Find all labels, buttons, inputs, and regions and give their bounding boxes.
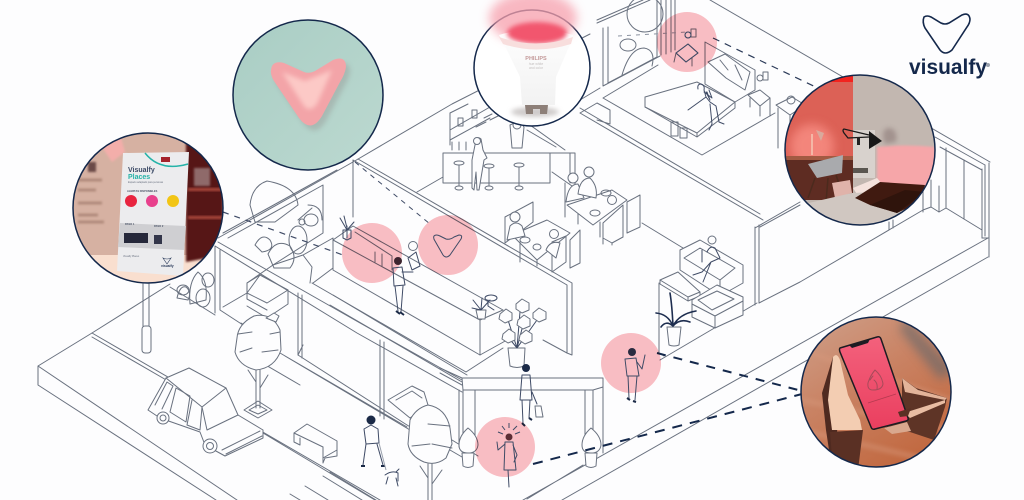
bedroom with bed and person <box>603 29 805 155</box>
bulb body <box>499 22 573 114</box>
person on the bed <box>688 84 724 130</box>
person at the counter <box>393 242 420 315</box>
photo circle: bedroom <box>785 75 940 225</box>
poster sheet: PASO 2 <box>154 224 164 228</box>
canopy and entry <box>388 368 603 453</box>
bags <box>671 122 687 138</box>
street and sidewalk <box>38 284 410 500</box>
bench <box>294 424 337 463</box>
counter and back wall, upper floor <box>330 159 572 382</box>
garden plants behind left wing <box>177 181 322 307</box>
pink highlight: heart sensor <box>418 215 478 275</box>
logo heart <box>923 14 970 53</box>
poster sheet: visualfy <box>161 264 174 268</box>
photo circle: smart bulb <box>474 0 590 126</box>
photo circle: poster <box>73 133 223 283</box>
restaurant tables and diners <box>505 167 683 272</box>
poster sheet: Espacio adaptado para personas <box>128 181 164 184</box>
long floor edges <box>523 238 988 500</box>
bartender <box>472 138 487 190</box>
right wing walls and door <box>523 137 989 500</box>
poster sheet: Visualfy <box>128 167 155 174</box>
photo circle: heart sensor <box>233 20 383 170</box>
nightstands <box>748 90 770 106</box>
pink highlight: woman alerted <box>475 417 535 487</box>
pink highlight: bedroom lamp <box>657 12 717 72</box>
logo wordmark: visualfy <box>909 56 987 79</box>
poster sheet: Visualfy Places <box>123 255 140 258</box>
wall lamps <box>685 32 691 38</box>
small vase with branches <box>340 216 354 240</box>
pink highlight: person with phone <box>601 333 661 402</box>
car <box>148 368 263 456</box>
phone <box>840 337 908 429</box>
poster sheet <box>117 152 189 276</box>
crosswalk <box>290 472 376 500</box>
large potted plant <box>499 299 546 368</box>
right hand <box>884 378 947 440</box>
building: left wing lower <box>170 34 590 457</box>
logo registered mark <box>986 63 990 67</box>
left hand <box>822 357 838 452</box>
bulb body: hue white <box>529 62 543 66</box>
bulb body: PHILIPS <box>525 56 547 62</box>
photo circle: phone app <box>801 317 955 470</box>
poster sheet: Places <box>128 174 150 181</box>
fern in pot <box>656 293 696 327</box>
wall lamp <box>843 129 869 138</box>
small plant and lamp on counter <box>472 295 497 319</box>
poster sheet: ALERTAS DISPONIBLES <box>127 189 158 193</box>
pink highlight: poster spot <box>342 223 402 283</box>
street trees and lamp posts <box>142 284 601 500</box>
lounge sofas and plant <box>659 236 743 356</box>
barista <box>510 123 524 148</box>
upper room: window wall <box>580 0 990 220</box>
bulb body: and color <box>529 66 544 70</box>
poster sheet: PASO 1 <box>125 222 135 226</box>
logo: visualfy <box>909 14 990 79</box>
connector dashed lines <box>223 32 822 464</box>
bed <box>808 192 904 224</box>
pedestrian with shopping bag <box>520 364 543 426</box>
nightstand <box>832 180 852 198</box>
bar counter with stools and shelves <box>443 104 575 190</box>
pedestrian walking dog <box>361 416 399 486</box>
